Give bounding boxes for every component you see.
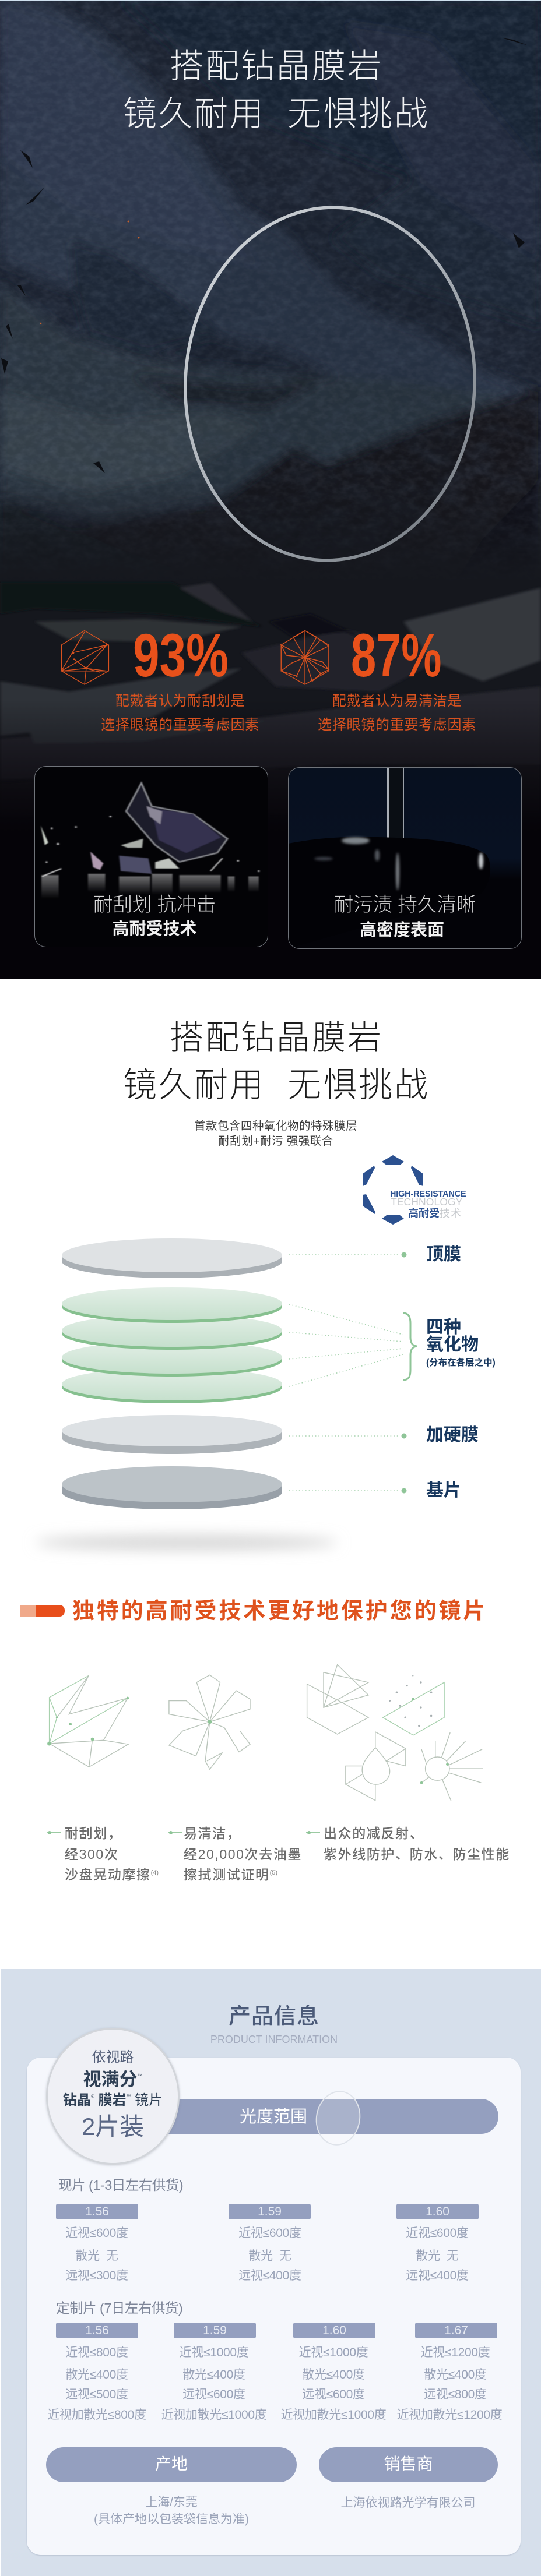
icon: easy clean: [169, 1675, 250, 1769]
icon: water proof: [346, 1732, 406, 1801]
image: crystal shards: [40, 781, 261, 897]
icon: hexagon segments: [363, 1155, 423, 1225]
icon: orange scratch crystal: [61, 630, 110, 685]
text: 近视≤600度: [65, 2226, 128, 2240]
heading: custom lenses: 定制片 (7日左右供货): [56, 2300, 182, 2316]
text: other benefits: 出众的减反射、: [324, 1826, 424, 1841]
icon: UV protection: [383, 1675, 444, 1735]
subtitle: hero: 镜久耐用 无惧挑战: [123, 95, 430, 133]
chip: 1.56: 1.56: [85, 2205, 109, 2218]
column: stock 1.56: [65, 2226, 128, 2282]
text: 散光≤400度: [182, 2368, 245, 2381]
icons: green line art: [47, 1664, 483, 1801]
layer: hard coat: [62, 1415, 282, 1454]
text: clean stat caption: 配戴者认为易清洁是: [332, 693, 462, 709]
text: pack size: 2片装: [82, 2113, 144, 2140]
text: other benefits: [324, 1826, 510, 1862]
column: stock 1.59: [238, 2226, 301, 2282]
column: stock 1.60: [406, 2226, 469, 2282]
image: liquid stream: [289, 768, 490, 947]
background: dark mountain scene: [0, 0, 541, 979]
bullet 2: [168, 1832, 182, 1833]
bar: power range: [157, 2099, 498, 2134]
brace: [403, 1313, 417, 1380]
label: substrate: 基片: [426, 1481, 461, 1500]
icon: scratch resistance: [47, 1676, 129, 1767]
text: 散光 无: [416, 2249, 459, 2263]
text: 近视加散光≤800度: [47, 2408, 146, 2422]
lens ring: [184, 206, 476, 562]
column: custom 1.67: [397, 2346, 502, 2422]
text: logo chinese: 高耐受技术: [408, 1208, 462, 1219]
label: hard coat: 加硬膜: [426, 1425, 479, 1445]
chip: 1.59: 1.59: [203, 2324, 227, 2337]
text: distributor value: 上海依视路光学有限公司: [340, 2496, 476, 2510]
layer: oxide 2: [62, 1314, 282, 1350]
title: section two: 搭配钻晶膜岩: [170, 1019, 383, 1057]
text: 远视≤800度: [424, 2388, 487, 2401]
text: 散光≤400度: [424, 2368, 487, 2381]
text: logo english: HIGH-RESISTANCE: [390, 1190, 466, 1199]
chip: 1.67: 1.67: [444, 2324, 468, 2337]
column: custom 1.56: [47, 2346, 146, 2422]
text: clean stat caption line 2: 选择眼镜的重要考虑因素: [318, 717, 476, 733]
text: 近视≤1200度: [421, 2346, 490, 2359]
chip: 1.59: [229, 2204, 311, 2219]
chip: 1.60: 1.60: [426, 2205, 449, 2218]
text: 近视加散光≤1200度: [397, 2408, 502, 2422]
text: 近视加散光≤1000度: [161, 2408, 266, 2422]
text: origin note: (具体产地以包装袋信息为准): [94, 2513, 249, 2526]
text: logo technology: TECHNOLOGY: [391, 1196, 463, 1208]
text: product name: 视满分™: [83, 2069, 142, 2090]
icon: dust proof: [420, 1732, 483, 1801]
column: custom 1.59: [161, 2346, 266, 2422]
text: 散光≤400度: [302, 2368, 365, 2381]
layer: oxide 4: [62, 1368, 282, 1403]
text: 散光≤400度: [65, 2368, 128, 2381]
chip: 1.67: [415, 2323, 497, 2338]
text: 近视≤600度: [238, 2226, 301, 2240]
heading: stock lenses: 现片 (1-3日左右供货): [58, 2178, 183, 2193]
panel: stain resistance card: [288, 767, 522, 949]
label: oxides second line: 氧化物: [426, 1335, 479, 1354]
layer: oxide 3: [62, 1341, 282, 1377]
text: clean benefit: 经20,000次去油墨: [184, 1847, 302, 1862]
text: origin value: 上海/东莞: [145, 2496, 198, 2509]
shadow under stack: [35, 1535, 338, 1550]
text: card heading: 耐刮划 抗冲击: [93, 894, 216, 916]
icon: anti reflective: [307, 1665, 368, 1734]
heading marker bar: [20, 1605, 65, 1617]
text: other benefits: 紫外线防护、防水、防尘性能: [324, 1847, 510, 1862]
text: 近视≤800度: [65, 2346, 128, 2359]
text: 远视≤400度: [238, 2269, 301, 2282]
diagram: lens layer stack: [41, 1238, 417, 1555]
chip: 1.60: 1.60: [322, 2324, 346, 2337]
text: lens type: 钻晶® 膜岩™ 镜片: [63, 2092, 163, 2108]
text: scratch benefit: [65, 1826, 159, 1882]
bullet 3: [306, 1832, 320, 1833]
pill: distributor: 销售商: [384, 2455, 433, 2473]
title: hero: 搭配钻晶膜岩: [170, 47, 383, 85]
text: scratch benefit: 经300次: [65, 1847, 118, 1862]
text: clean benefit: 擦拭测试证明(5): [184, 1867, 277, 1882]
layer: oxide 1: [62, 1287, 282, 1323]
text: 远视≤600度: [302, 2388, 365, 2401]
label: top coat: 顶膜: [426, 1245, 461, 1264]
panel: info card: [27, 2058, 521, 2555]
text: 散光 无: [248, 2249, 291, 2263]
panel: scratch resistance card: [34, 766, 268, 947]
text: intro line 1: 首款包含四种氧化物的特殊膜层: [194, 1120, 357, 1132]
text: 近视≤1000度: [180, 2346, 248, 2359]
text: clean benefit: [184, 1826, 302, 1882]
layer: top coat: [62, 1238, 282, 1278]
column: custom 1.60: [281, 2346, 386, 2422]
text: scratch benefit: 耐刮划，: [65, 1826, 122, 1841]
chip: 1.56: [56, 2323, 138, 2338]
stat: 93%: 93%: [133, 622, 229, 690]
text: card heading: 耐污渍 持久清晰: [334, 894, 476, 916]
chip: 1.59: 1.59: [258, 2205, 282, 2218]
text: scratch benefit: 沙盘晃动摩擦(4): [65, 1867, 159, 1882]
subheading: english: PRODUCT INFORMATION: [210, 2034, 338, 2045]
icon: orange clean crystal: [280, 630, 330, 685]
text: 远视≤500度: [65, 2388, 128, 2401]
text: 近视≤1000度: [299, 2346, 368, 2359]
pill: distributor: [319, 2447, 498, 2482]
subtitle: section two: 镜久耐用 无惧挑战: [123, 1066, 430, 1104]
text: power range: 光度范围: [240, 2108, 307, 2126]
text: 近视≤600度: [406, 2226, 469, 2240]
logo: high-resistance technology: [363, 1155, 466, 1225]
text: 近视加散光≤1000度: [281, 2408, 386, 2422]
icon: small lens: [316, 2091, 360, 2146]
chip: 1.59: [174, 2323, 256, 2338]
text: 远视≤300度: [65, 2269, 128, 2282]
text: 远视≤600度: [182, 2388, 245, 2401]
text: intro line 2: 耐刮划+耐污 强强联合: [218, 1135, 333, 1148]
text: 远视≤400度: [406, 2269, 469, 2282]
leader lines: [289, 1255, 403, 1491]
chip: 1.60: [396, 2204, 479, 2219]
text: 散光 无: [75, 2249, 118, 2263]
stat: 87%: 87%: [351, 622, 442, 690]
chip: 1.56: 1.56: [85, 2324, 109, 2337]
text: brand: 依视路: [92, 2049, 134, 2065]
label: four oxides: 四种: [426, 1318, 461, 1337]
text: card subheading: 高密度表面: [360, 921, 444, 940]
pill: origin: 产地: [155, 2455, 188, 2473]
text: scratch stat caption: 配戴者认为耐刮划是: [115, 693, 245, 709]
chip: 1.60: [293, 2323, 375, 2338]
panel: product information background: [1, 1969, 541, 2576]
bullet 1: [47, 1832, 61, 1833]
text: card subheading: 高耐受技术: [112, 920, 197, 938]
label: oxides note: (分布在各层之中): [426, 1358, 496, 1368]
leader dots: [401, 1252, 407, 1494]
heading: technology benefits: 独特的高耐受技术更好地保护您的镜片: [72, 1599, 487, 1624]
pill: origin: [46, 2447, 297, 2482]
chip: 1.56: [56, 2204, 138, 2219]
badge: product pack: [46, 2028, 180, 2165]
text: clean benefit: 易清洁，: [184, 1826, 241, 1841]
heading: product information: 产品信息: [229, 2005, 319, 2029]
layer: substrate: [62, 1466, 282, 1509]
text: scratch stat caption line 2: 选择眼镜的重要考虑因素: [101, 717, 259, 733]
